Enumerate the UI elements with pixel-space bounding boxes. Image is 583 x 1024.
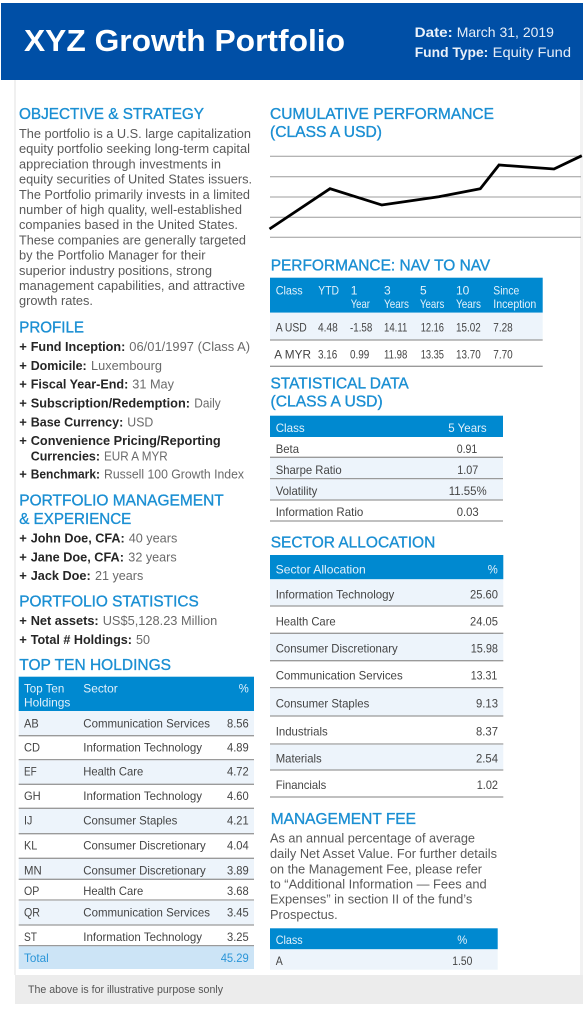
panel: portfolio statistics [19, 593, 217, 647]
item: base currency: USD [127, 414, 153, 429]
row IJ: IJ [24, 813, 32, 827]
row OP [19, 884, 254, 900]
item: benchmark: Russell 100 Growth Index [104, 467, 244, 482]
panel: cumulative performance [270, 106, 582, 237]
row industrials [270, 724, 503, 744]
row EF: 4.72 [227, 765, 249, 779]
row materials: Materials [276, 752, 322, 766]
table header [19, 677, 254, 711]
table header: Years [384, 297, 409, 311]
row volatility: 11.55% [449, 484, 487, 498]
row consumer discretionary [270, 634, 503, 661]
row sharpe ratio: Sharpe Ratio [276, 463, 342, 477]
text block: objective description: equity portfolio seeking long-term capital [19, 141, 250, 156]
item: benchmark: + [19, 467, 27, 482]
row information technology: Information Technology [276, 587, 394, 601]
heading: statistical data: (CLASS A USD) [270, 394, 383, 411]
text block: management fee description: As an annual percentage of average [270, 831, 475, 846]
item: fund inception [19, 339, 250, 354]
text block: objective description: superior industry positions, strong [19, 263, 212, 278]
footer note: The above is for illustrative purpose sonly [28, 984, 223, 996]
table header: 10 [456, 283, 470, 297]
row sharpe ratio: 1.07 [457, 463, 479, 477]
row health care [270, 614, 503, 633]
row CD: Information Technology [83, 741, 202, 755]
row A MYR: 11.98 [384, 348, 408, 362]
text block: management fee description: Expenses” in section II of the fund’s [270, 892, 473, 907]
table: top ten holdings [19, 677, 254, 969]
row KL: KL [24, 839, 38, 853]
row information technology: 25.60 [470, 587, 498, 601]
table header: Class [276, 933, 303, 947]
row GH: 4.60 [227, 789, 249, 803]
table header: Sector Allocation [276, 562, 366, 576]
row MN: 3.89 [227, 863, 249, 877]
item: convenience pricing: Currencies: [31, 448, 100, 463]
heading: statistical data: STATISTICAL DATA [270, 376, 409, 393]
text block: objective description: appreciation through investments in [19, 156, 221, 171]
row financials: 1.02 [477, 778, 498, 792]
table header: % [488, 562, 498, 576]
row A USD: 12.16 [421, 321, 444, 335]
table header: Inception [493, 297, 536, 311]
row IJ [19, 809, 254, 834]
row OP: Health Care [83, 884, 144, 898]
panel: portfolio management [19, 493, 224, 583]
date and fund type: Fund Type: [415, 44, 488, 60]
heading: management fee: MANAGEMENT FEE [271, 811, 416, 828]
row A USD: 7.28 [493, 321, 513, 335]
text block: objective description: The portfolio is a U.S. large capitalization [19, 126, 251, 141]
row A MYR [270, 348, 543, 366]
item: jane doe: 32 years [128, 549, 177, 564]
row consumer discretionary: 15.98 [471, 642, 498, 656]
header banner [1, 3, 583, 80]
row consumer staples [270, 688, 503, 716]
row OP: OP [24, 884, 39, 898]
item: subscription and redemption: Daily [194, 396, 221, 411]
table header [270, 928, 498, 949]
row A USD: A USD [276, 321, 307, 335]
row A MYR: 7.70 [493, 348, 513, 362]
panel: performance nav to nav [270, 258, 543, 366]
row A USD: -1.58 [350, 321, 373, 335]
row total [19, 946, 254, 969]
heading: portfolio statistics: PORTFOLIO STATISTICS [19, 593, 199, 610]
row beta: Beta [276, 442, 299, 456]
table header: % [457, 933, 468, 947]
item: fund inception: Fund Inception: [31, 339, 125, 354]
row KL: 4.04 [227, 839, 249, 853]
text block: objective description [19, 126, 252, 308]
item: total holdings: Total # Holdings: [31, 632, 132, 647]
row QR: 3.45 [227, 905, 249, 919]
text block: objective description: These companies are generally targeted [19, 232, 246, 247]
heading: profile: PROFILE [19, 319, 84, 336]
table header: % [239, 682, 249, 696]
row financials [270, 778, 503, 797]
row ST: 3.25 [227, 930, 249, 944]
row class A: 1.50 [452, 954, 473, 968]
row MN [19, 859, 254, 879]
item: net assets: + [19, 613, 27, 628]
row OP: 3.68 [227, 884, 249, 898]
row class A [270, 949, 498, 970]
row CD: 4.89 [227, 741, 249, 755]
row class A: A [276, 954, 283, 968]
panel: top ten holdings [19, 657, 254, 969]
row beta: 0.91 [457, 442, 478, 456]
table header: Years [456, 297, 481, 311]
row CD [19, 741, 254, 760]
item: convenience pricing [19, 433, 221, 463]
item: fiscal year-end [19, 377, 174, 392]
row communication services: 13.31 [471, 669, 498, 683]
row financials: Financials [276, 778, 326, 792]
heading: performance nav to nav: PERFORMANCE: NAV TO NAV [271, 258, 491, 274]
text block: objective description: The Portfolio primarily invests in a limited [19, 187, 250, 202]
table header: Holdings [24, 696, 70, 710]
row QR: QR [24, 905, 40, 919]
row sharpe ratio [270, 458, 503, 479]
table header [270, 555, 503, 579]
item: jane doe: + [19, 549, 27, 564]
title: XYZ Growth Portfolio [24, 23, 345, 58]
panel: management fee [270, 811, 498, 970]
row MN: Consumer Discretionary [83, 863, 206, 877]
row materials: 2.54 [476, 752, 498, 766]
date and fund type [415, 24, 571, 60]
row A USD: 14.11 [384, 321, 408, 335]
row consumer discretionary: Consumer Discretionary [276, 642, 398, 656]
table header: Year [351, 297, 370, 311]
item: fiscal year-end: 31 May [132, 377, 174, 392]
heading: cumulative performance: (CLASS A USD) [270, 124, 382, 141]
heading: cumulative performance [270, 106, 494, 141]
row A USD: 4.48 [318, 321, 338, 335]
row information ratio: 0.03 [457, 505, 479, 519]
row ST: Information Technology [83, 930, 202, 944]
table: sector allocation [270, 555, 503, 797]
item: fiscal year-end: + [19, 377, 27, 392]
heading: top ten holdings: TOP TEN HOLDINGS [19, 657, 171, 674]
item: fund inception: 06/01/1997 (Class A) [129, 339, 250, 354]
text block: objective description: by the Portfolio Manager for their [19, 248, 206, 263]
item: jack doe: 21 years [95, 568, 144, 583]
row A USD: 15.02 [456, 321, 481, 335]
item: fiscal year-end: Fiscal Year-End: [31, 377, 128, 392]
panel: sector allocation [270, 534, 503, 797]
text block: management fee description: on the Management Fee, please refer [270, 861, 483, 876]
row KL: Consumer Discretionary [83, 839, 206, 853]
row EF: EF [24, 765, 37, 779]
row A MYR: 13.70 [456, 348, 481, 362]
footer band [15, 975, 583, 1004]
item: john doe [19, 530, 178, 545]
row total: Total [24, 951, 49, 965]
row QR [19, 901, 254, 925]
row AB: 8.56 [227, 716, 249, 730]
row CD: CD [24, 741, 40, 755]
text block: management fee description [270, 831, 497, 922]
item: domicile: Luxembourg [91, 358, 162, 373]
row MN: MN [24, 863, 42, 877]
table header: 1 [351, 283, 358, 297]
heading: portfolio management and experience [19, 493, 224, 528]
row communication services [270, 669, 503, 688]
table header: Since [493, 283, 520, 297]
table: management fee [270, 928, 498, 970]
item: total holdings: 50 [136, 632, 150, 647]
row AB: Communication Services [83, 716, 210, 730]
heading: portfolio management and experience: PORTFOLIO MANAGEMENT [19, 493, 224, 510]
table header: Top Ten [24, 682, 64, 696]
text block: management fee description: to “Additional Information — Fees and [270, 876, 487, 891]
row communication services: Communication Services [276, 669, 403, 683]
table: statistical data [270, 416, 503, 521]
row volatility: Volatility [276, 484, 317, 498]
item: jane doe [19, 549, 177, 564]
row materials [270, 745, 503, 770]
row health care: Health Care [276, 614, 336, 628]
row consumer staples: Consumer Staples [276, 696, 369, 710]
heading: statistical data [270, 376, 409, 411]
text block: objective description: companies based in the United States. [19, 217, 238, 232]
item: jack doe: Jack Doe: [31, 568, 91, 583]
text block: objective description: equity securities of United States issuers. [19, 172, 252, 187]
item: fund inception: + [19, 339, 27, 354]
heading: objective and strategy: OBJECTIVE & STRATEGY [19, 106, 204, 123]
panel: objective and strategy [19, 106, 252, 308]
row A USD [270, 313, 543, 340]
item: jack doe [19, 568, 144, 583]
row GH [19, 789, 254, 808]
table header: Sector [83, 682, 118, 696]
item: convenience pricing: + [19, 433, 27, 448]
item: base currency: Base Currency: [31, 414, 123, 429]
row GH: GH [24, 789, 41, 803]
row industrials: Industrials [276, 724, 328, 738]
item: domicile [19, 358, 162, 373]
row industrials: 8.37 [476, 724, 498, 738]
table header: 5 [420, 283, 427, 297]
item: john doe: + [19, 530, 27, 545]
item: jane doe: Jane Doe, CFA: [31, 549, 124, 564]
row health care: 24.05 [470, 614, 498, 628]
heading: sector allocation: SECTOR ALLOCATION [271, 534, 435, 551]
row ST [19, 930, 254, 946]
table header [270, 416, 503, 437]
row information ratio: Information Ratio [276, 505, 364, 519]
item: convenience pricing: EUR A MYR [104, 448, 168, 463]
row EF: Health Care [83, 765, 144, 779]
item: net assets: Net assets: [31, 613, 99, 628]
date and fund type: March 31, 2019 [457, 24, 554, 40]
item: john doe: John Doe, CFA: [31, 530, 125, 545]
table header: 5 Years [448, 421, 487, 435]
date and fund type: Date: [415, 24, 453, 40]
row IJ: Consumer Staples [83, 813, 177, 827]
panel: profile [19, 319, 250, 482]
item: base currency: + [19, 414, 27, 429]
item: subscription and redemption: + [19, 396, 27, 411]
row volatility [270, 479, 503, 500]
item: benchmark [19, 467, 244, 482]
item: john doe: 40 years [129, 530, 178, 545]
row QR: Communication Services [83, 905, 210, 919]
text block: objective description: growth rates. [19, 293, 93, 308]
item: benchmark: Benchmark: [31, 467, 100, 482]
table header: Class [276, 283, 303, 297]
date and fund type: Equity Fund [493, 44, 571, 60]
item: convenience pricing: Convenience Pricing/Reporting [31, 433, 221, 448]
table header: Class [276, 421, 305, 435]
row ST: ST [24, 930, 38, 944]
row information ratio [270, 505, 503, 521]
row information technology [270, 579, 503, 606]
row A MYR: 0.99 [350, 348, 370, 362]
row IJ: 4.21 [227, 813, 249, 827]
row AB: AB [24, 716, 39, 730]
text block: management fee description: daily Net Asset Value. For further details [270, 846, 497, 861]
row KL [19, 839, 254, 858]
table header: 3 [384, 283, 391, 297]
panel: statistical data [270, 376, 503, 521]
table header [270, 278, 543, 313]
row AB [19, 711, 254, 736]
item: total holdings: + [19, 632, 27, 647]
item: net assets: US$5,128.23 Million [103, 613, 217, 628]
row total: 45.29 [221, 951, 249, 965]
item: domicile: + [19, 358, 27, 373]
row GH: Information Technology [83, 789, 202, 803]
heading: cumulative performance: CUMULATIVE PERFORMANCE [270, 106, 494, 123]
line chart [270, 156, 582, 237]
item: domicile: Domicile: [31, 358, 87, 373]
row A MYR: 3.16 [318, 348, 338, 362]
item: jack doe: + [19, 568, 27, 583]
table: performance [270, 278, 543, 366]
text block: management fee description: Prospectus. [270, 907, 338, 922]
row A MYR: 13.35 [421, 348, 444, 362]
text block: objective description: number of high quality, well-established [19, 202, 242, 217]
table header: Years [420, 297, 444, 311]
row beta [270, 442, 503, 457]
text block: objective description: management capabilities, and attractive [19, 278, 245, 293]
item: subscription and redemption: Subscription/Redemption: [31, 396, 190, 411]
row A MYR: A MYR [274, 348, 311, 362]
table header: YTD [318, 283, 339, 297]
row consumer staples: 9.13 [476, 696, 498, 710]
item: net assets [19, 613, 217, 628]
heading: portfolio management and experience: & EXPERIENCE [19, 511, 131, 528]
row EF [19, 760, 254, 784]
